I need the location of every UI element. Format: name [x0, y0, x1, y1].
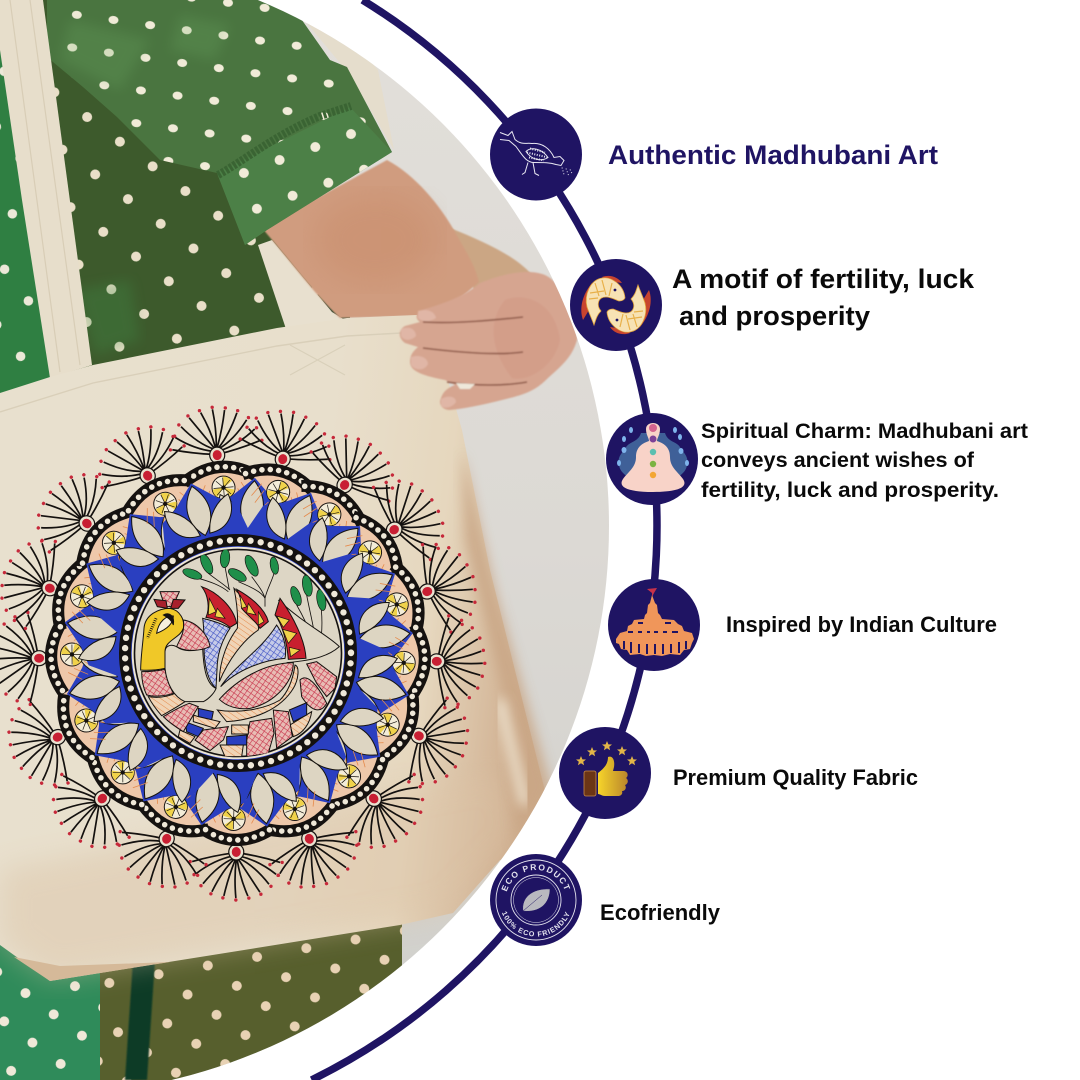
dotted scalloped ring: [49, 463, 427, 840]
peacock feather ring: [0, 400, 489, 902]
leaf: [523, 889, 550, 911]
upper strap behind sleeve: [307, 23, 394, 148]
thumb and fist: [598, 757, 628, 796]
chakras: [649, 424, 657, 478]
peacock centerpiece: [141, 549, 339, 757]
temple windows and pillars: [624, 623, 686, 654]
dark gap below arm: [323, 300, 350, 318]
green leaves: [181, 549, 327, 611]
label: Authentic Madhubani Art: Authentic Madhubani Art: [608, 140, 938, 170]
crown: [160, 592, 179, 607]
branches: [200, 568, 322, 633]
orange collar: [148, 693, 185, 716]
sleeve highlights: [66, 20, 228, 88]
icon: temple: [608, 579, 700, 671]
icon: meditating figure with chakras: [606, 413, 698, 505]
elastic gather: [218, 106, 351, 175]
eye: [157, 616, 173, 633]
studio wall background: [172, 0, 609, 1080]
tan shaded bag side: [462, 450, 552, 850]
lower right tail feathers: [247, 662, 337, 757]
neck: [165, 645, 216, 702]
light crease highlight: [500, 700, 525, 805]
blue left wing: [203, 618, 230, 688]
tan lower bag tone: [0, 796, 506, 992]
lower skirt green: [0, 945, 100, 1080]
orange body band: [217, 665, 298, 722]
red and yellow wing tips: [202, 587, 306, 659]
photo: model holding Madhubani tote in circular crop: [0, 0, 640, 1080]
Madhubani mandala artwork: [0, 400, 489, 902]
hand holding the bag: [400, 272, 577, 410]
energy drops: [617, 427, 689, 466]
icon: eco product stamp: [490, 854, 582, 946]
seated body: [622, 423, 684, 492]
stamp rings: [496, 860, 576, 940]
cuff: [584, 771, 596, 796]
label: Ecofriendly: Ecofriendly: [600, 900, 721, 925]
icon: thumbs up with stars: [559, 727, 651, 819]
lotus petals and flowers: [52, 467, 424, 839]
salmon mandala base: [63, 692, 68, 694]
dress sleeve: [47, 0, 392, 245]
green dress left of strap: [0, 51, 50, 393]
forearm: [262, 160, 479, 318]
handle stitching shade: [10, 0, 80, 372]
five stars: [576, 741, 637, 765]
beak: [177, 620, 210, 650]
stamp bottom text: 100% ECO FRIENDLY: [502, 911, 570, 937]
label: Spiritual Charm: Spiritual Charm: Madhubani art: [701, 420, 1028, 443]
label: Inspired by Indian Culture: Inspired by Indian Culture: [726, 612, 997, 637]
tote bag body: [0, 315, 560, 981]
label: A motif of fertility: [672, 264, 975, 331]
tail plume lines: [278, 600, 339, 663]
label: A motif of fertility: A motif of fertility, luck: [672, 264, 975, 294]
inner dotted ring: [125, 540, 351, 766]
timeline arc: [312, 0, 657, 1080]
flag: [647, 588, 657, 597]
orange mid wing: [219, 588, 258, 682]
back arm: [452, 228, 530, 288]
right bag handle: [258, 240, 345, 332]
olive dress torso: [43, 0, 324, 370]
bag top hem: [0, 332, 420, 412]
tan bottom hem: [14, 957, 170, 981]
red body: [219, 663, 293, 709]
sleeve cuff frill: [217, 107, 392, 245]
label: Spiritual Charm: conveys ancient wishes of: [701, 449, 975, 472]
forearm warm shading: [330, 206, 422, 272]
scallop wedges: [49, 463, 427, 840]
dark skirt fold: [125, 960, 155, 1080]
stitched X patch: [290, 345, 345, 375]
inner beige disc: [133, 548, 343, 758]
temple silhouette: [616, 595, 694, 656]
label: Spiritual Charm: fertility, luck and prosperity.: [701, 479, 999, 502]
blue band: [131, 546, 345, 760]
red belly strip: [163, 703, 198, 732]
head: [141, 608, 184, 670]
lower left tail feathers: [178, 708, 248, 757]
blue main wing: [221, 625, 286, 687]
icon: peacock sketch: [490, 108, 582, 200]
label: Premium Quality Fabric: Premium Quality Fabric: [673, 765, 918, 790]
label: Spiritual Charm: [701, 420, 1028, 502]
stamp top text: ECO PRODUCT: [501, 864, 570, 892]
bright green torso highlight: [82, 282, 142, 352]
label: A motif of fertility: and prosperity: [679, 301, 870, 331]
icon: twin koi fish: [570, 259, 662, 351]
blue aura: [619, 433, 687, 481]
lower skirt olive: [100, 924, 402, 1080]
left bag handle: [0, 0, 92, 378]
breast: [142, 669, 173, 696]
